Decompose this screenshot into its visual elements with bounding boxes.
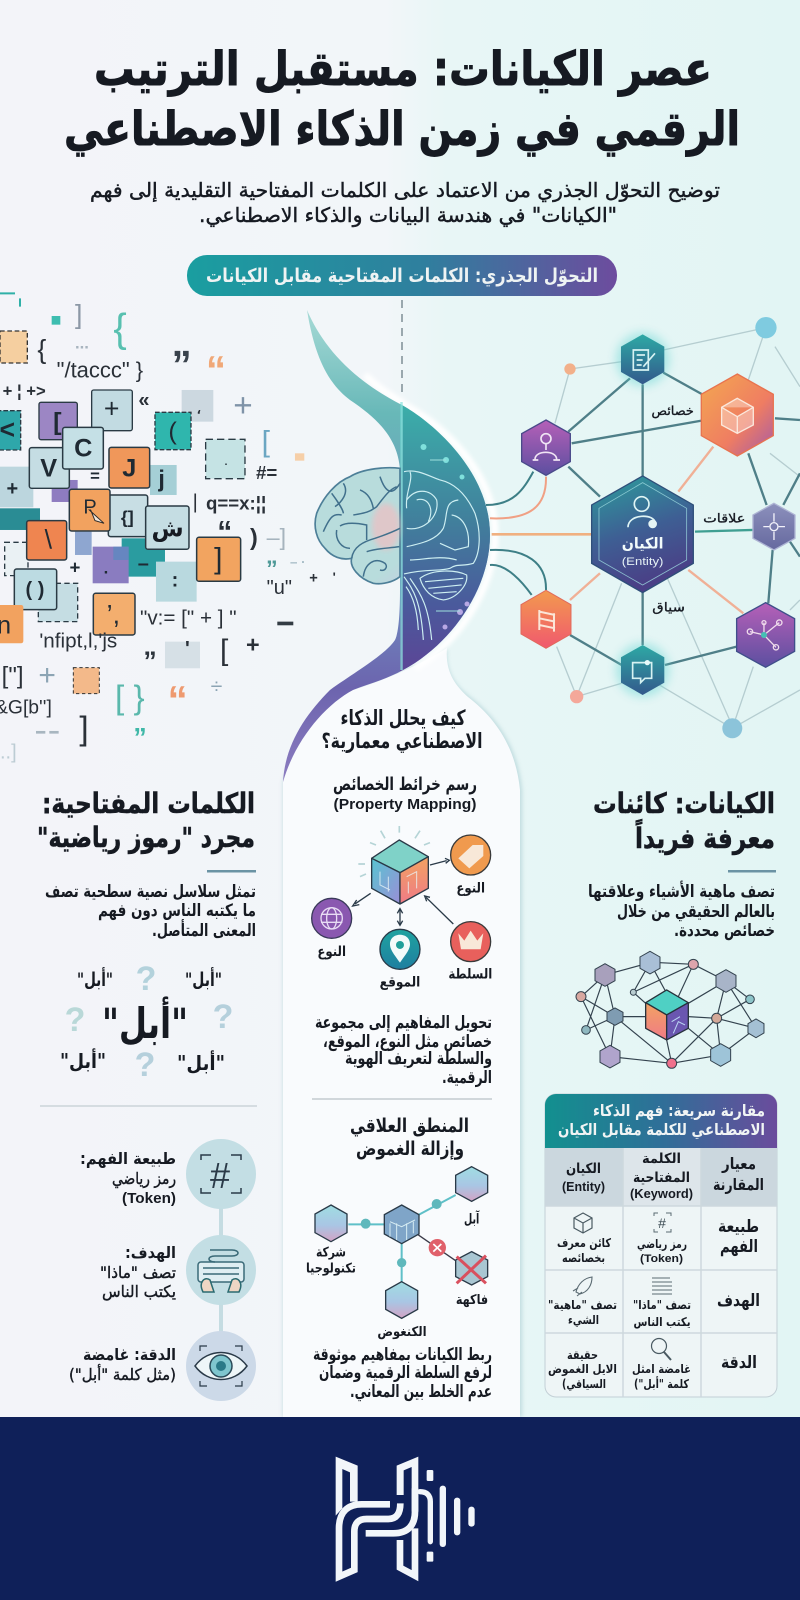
header row fill [545, 1146, 777, 1206]
property mapping paragraph [315, 1013, 492, 1088]
relational paragraph: ربط الكيانات بمفاهيم موثوقة [313, 1345, 492, 1365]
rays [358, 826, 430, 877]
row label cells [717, 1217, 760, 1373]
folds [323, 477, 400, 577]
loose middle and bottom symbols: + [246, 632, 260, 658]
central entity hexagon: (Entity) [622, 556, 664, 568]
loose middle and bottom symbols: 'nfipt,l,'js [39, 629, 117, 652]
tile glyphs: ش [152, 515, 184, 543]
hexes [315, 1167, 488, 1318]
header cells: المقارنة [713, 1175, 764, 1194]
loose middle and bottom symbols: ) [250, 524, 258, 550]
tile glyphs: J [122, 455, 136, 483]
hourglass ribbon [283, 310, 490, 782]
sub heading: property mapping: (Property Mapping) [334, 796, 477, 813]
woven H strokes [339, 1488, 415, 1577]
brain left half [315, 468, 400, 584]
heading [37, 787, 255, 854]
curves from the brain [486, 472, 592, 595]
hex: chat [616, 643, 669, 697]
dashed centre line [401, 300, 403, 395]
item: goal [100, 1235, 256, 1305]
tiles back layer [0, 390, 245, 622]
droplet right half [400, 404, 490, 671]
item: goal: تصف "ماذا" [100, 1263, 176, 1282]
description [45, 882, 256, 941]
sub heading: relational logic: وإزالة الغموض [356, 1138, 464, 1160]
loose top symbols: "/taccc" } [57, 357, 143, 382]
tile glyphs: [ [53, 408, 62, 436]
row: goal cells: تصف "ماذا" [633, 1298, 691, 1312]
arrows [353, 858, 453, 925]
tile glyphs: : [172, 570, 178, 592]
property mapping paragraph: خصائص مثل النوع، الموقع، [323, 1032, 492, 1052]
row: accuracy cells: الايل الغموض [548, 1362, 617, 1377]
labels: تكنولوجيا [306, 1262, 356, 1277]
row label cells: الدقة [721, 1353, 757, 1373]
tile glyphs: < [0, 414, 15, 444]
footer band [0, 1417, 800, 1600]
item: accuracy: الدقة: غامضة [83, 1345, 176, 1364]
relational paragraph: لرفع السلطة الرقمية وضمان [319, 1363, 492, 1383]
labels [317, 881, 492, 991]
row: goal cells [548, 1277, 691, 1329]
comparison table [545, 1094, 777, 1397]
row: accuracy cells: غامضة امثل [632, 1362, 691, 1376]
row: nature cells: (Token) [640, 1253, 683, 1265]
loose middle and bottom symbols: “ [217, 516, 232, 549]
header cells: الكيان [566, 1161, 601, 1177]
links [581, 963, 756, 1063]
ambiguous apple word cloud: "أبل" [60, 1047, 106, 1073]
hex: cube [701, 374, 773, 456]
loose top symbols [0, 293, 304, 461]
item: nature of understanding: (Token) [122, 1190, 176, 1207]
row: nature cells: بخصائصه [562, 1251, 605, 1265]
row label cells: الهدف [717, 1291, 760, 1311]
labels: شركة [316, 1246, 346, 1261]
vertical connector [219, 1200, 223, 1340]
loose middle and bottom symbols: ” [266, 556, 278, 582]
faint connector lines [555, 328, 800, 728]
pink highlight [372, 503, 400, 550]
label: entity: الكيان [622, 534, 663, 552]
loose middle and bottom symbols: “ [168, 678, 188, 722]
tile glyphs: ( ) [26, 579, 44, 601]
ambiguous apple word cloud: "أبل" [177, 1049, 225, 1075]
loose middle and bottom symbols: + [38, 659, 56, 692]
ambiguous apple word cloud: "أبل" [77, 967, 113, 991]
sub heading: relational logic: المنطق العلاقي [350, 1115, 469, 1137]
loose middle and bottom symbols: q==x:¦¦ [206, 492, 266, 513]
heading: الكلمات المفتاحية: [42, 787, 255, 820]
tile glyphs: ( [168, 417, 177, 445]
header cells: الكلمة [642, 1151, 681, 1167]
item: nature of understanding: طبيعة الفهم: [80, 1149, 176, 1168]
row: goal cells: الشيء [568, 1313, 599, 1327]
panel: entities [576, 787, 776, 1068]
tile glyphs: V [40, 455, 57, 483]
heading: مجرد "رموز رياضية" [37, 821, 255, 854]
row label cells: الفهم [720, 1237, 758, 1257]
hex: document [616, 333, 669, 386]
item: goal: يكتب الناس [102, 1282, 176, 1301]
right top stem [397, 1457, 418, 1512]
row: goal cells: تصف "ماهية" [548, 1298, 617, 1312]
header cells: (Keyword) [630, 1186, 693, 1201]
central entity hexagon [592, 476, 693, 593]
loose middle and bottom symbols: "v:= [" + ] " [140, 606, 237, 629]
centre to relations line [695, 530, 753, 532]
heading [322, 706, 482, 753]
tile glyphs: + [70, 556, 81, 577]
tile glyphs: + [6, 478, 18, 500]
labels: فاكهة [456, 1293, 488, 1308]
loose middle and bottom symbols: ” [133, 723, 147, 753]
item: accuracy: (مثل كلمة "أبل") [69, 1364, 176, 1384]
strong connector lines [568, 373, 800, 665]
ambiguous apple word cloud: ? [65, 1001, 85, 1039]
section pill heading: التحوّل الجذري: الكلمات المفتاحية مقابل الكيانات [206, 265, 598, 288]
heading: كيف يحلل الذكاء [340, 706, 466, 730]
loose middle and bottom symbols: "u" [267, 577, 292, 599]
loose top symbols: ، [197, 401, 201, 416]
item: goal: الهدف: [125, 1243, 176, 1262]
labels: النوع [456, 881, 485, 897]
ambiguous apple word cloud: "أبل" [102, 996, 188, 1048]
hex: network [737, 603, 795, 667]
loose top symbols: « [138, 390, 149, 412]
description: خصائص محددة. [674, 921, 775, 941]
row: accuracy cells: كلمة "أبل") [634, 1376, 689, 1391]
loose top symbols: + [233, 388, 253, 425]
ambiguous apple word cloud: ? [213, 998, 233, 1036]
tiles front layer [0, 427, 241, 643]
rejected mark [429, 1239, 486, 1283]
sub heading: property mapping [333, 774, 477, 813]
loose top symbols: ” [172, 343, 192, 387]
item: nature of understanding [80, 1139, 256, 1209]
header cells: (Entity) [562, 1179, 605, 1194]
tile glyphs: ] [214, 542, 222, 575]
nodes [576, 951, 764, 1068]
item: nature of understanding: # [210, 1155, 230, 1196]
loose middle and bottom symbols: | [193, 491, 198, 513]
tile glyphs: + [104, 393, 119, 423]
property: type tag [451, 835, 491, 875]
sound wave bars [427, 1470, 475, 1562]
tile glyphs: = [90, 467, 100, 486]
tile glyphs: . [104, 558, 108, 577]
property mapping paragraph: والسلطة لتعريف الهوية [345, 1049, 492, 1069]
disambiguation diagram [306, 1167, 488, 1340]
panel: how AI analyses [306, 706, 492, 1402]
labels [306, 1209, 488, 1340]
grid lines [545, 1148, 777, 1397]
row: nature cells [557, 1213, 687, 1265]
table title band [545, 1094, 777, 1148]
loose middle and bottom symbols: ' [185, 638, 190, 660]
ambiguous apple word cloud: "أبل" [185, 967, 222, 991]
relational paragraph [313, 1345, 492, 1402]
tile glyphs: {] [121, 507, 134, 527]
property mapping paragraph: الرقمية. [442, 1068, 492, 1088]
left top stem [336, 1457, 358, 1516]
loose middle and bottom symbols: –] [267, 524, 286, 550]
table body [545, 1094, 777, 1397]
table title band: الاصطناعي للكلمة مقابل الكيان [558, 1120, 765, 1140]
header cells [562, 1151, 764, 1201]
network labels: خصائص [651, 403, 694, 419]
section pill heading [187, 255, 617, 296]
orange connector lines [570, 447, 743, 613]
brain right half lines [404, 471, 479, 640]
heading: معرفة فريداً [635, 818, 775, 855]
tile glyphs: j [157, 466, 165, 492]
hex: relations node [753, 503, 795, 550]
glowing centre line [400, 402, 403, 670]
loose middle and bottom symbols: ÷ [211, 674, 223, 698]
loose middle and bottom symbols: ' [333, 570, 336, 585]
loose top symbols: “ [206, 348, 226, 392]
logo [336, 1457, 475, 1577]
loose middle and bottom symbols: #= [256, 462, 277, 483]
subtitle [90, 178, 720, 228]
outer balls [564, 317, 777, 738]
loose top symbols: ] [75, 299, 82, 329]
heading [593, 787, 775, 855]
row: accuracy cells: حقيقة [567, 1348, 598, 1362]
ambiguous apple word cloud [60, 960, 233, 1084]
item: accuracy [69, 1331, 256, 1401]
title: عصر الكيانات: مستقبل الترتيب [94, 42, 712, 97]
property: authority crown [451, 922, 491, 962]
keyword chaos of tiles and symbols [0, 293, 336, 763]
row: nature cells: # [658, 1215, 666, 1231]
hex: people [522, 420, 570, 475]
loose middle and bottom symbols: ["] [2, 662, 24, 689]
row label cells: طبيعة [718, 1217, 759, 1237]
row: accuracy cells [548, 1338, 691, 1391]
loose middle and bottom symbols: [ } [115, 679, 145, 716]
row: nature cells: رمز رياضي [637, 1237, 687, 1251]
labels: آبل [464, 1209, 480, 1227]
labels: الكنغوض [377, 1325, 427, 1340]
labels: النوع [317, 944, 346, 960]
property mapping paragraph: تحويل المفاهيم إلى مجموعة [315, 1013, 492, 1033]
tile glyphs: P [83, 496, 97, 518]
hex: database [521, 590, 571, 648]
description: ما يكتبه الناس دون فهم [98, 901, 256, 921]
panel: keywords [37, 787, 257, 1401]
description: المعنى المتأصل. [152, 919, 256, 941]
network labels: علاقات [703, 511, 745, 526]
centre white panel [283, 648, 522, 1417]
loose middle and bottom symbols: + [309, 571, 318, 587]
loose top symbols: { [113, 307, 127, 351]
property: location [380, 929, 420, 969]
description: تمثل سلاسل نصية سطحية تصف [45, 882, 256, 902]
labels: السلطة [448, 966, 492, 982]
links [348, 1195, 456, 1282]
network labels: سياق [652, 600, 685, 616]
description [588, 881, 775, 941]
central cube [646, 990, 688, 1040]
loose middle and bottom symbols [0, 462, 336, 763]
property mapping diagram [312, 826, 492, 991]
tile glyphs [0, 393, 228, 639]
tile glyphs: ’, [107, 599, 120, 629]
white glow edge [365, 375, 495, 668]
cube [372, 840, 428, 904]
ambiguous apple word cloud: ? [136, 960, 156, 998]
labels: الموقع [380, 975, 420, 991]
subtitle: توضيح التحوّل الجذري من الاعتماد على الكلمات المفتاحية التقليدية إلى فهم [90, 178, 720, 203]
loose middle and bottom symbols: ] [79, 710, 89, 747]
hourglass divider with brain [283, 300, 495, 782]
row: nature cells: كائن معرف [557, 1236, 611, 1250]
header cells: معيار [721, 1154, 756, 1173]
tile glyphs: . [225, 457, 228, 468]
row: goal cells: يكتب الناس [634, 1315, 690, 1329]
tile glyphs: C [74, 435, 92, 463]
sub heading: relational logic [350, 1115, 469, 1160]
item: nature of understanding: رمز رياضي [112, 1169, 176, 1189]
subtitle: "الكيانات" في هندسة البيانات والذكاء الاصطناعي. [199, 203, 617, 228]
header cells: المفتاحية [633, 1170, 690, 1186]
loose top symbols: ... [75, 333, 89, 352]
ambiguous apple word cloud: ? [135, 1046, 155, 1084]
loose middle and bottom symbols: ” [143, 646, 157, 676]
tile glyphs: \ [45, 524, 53, 554]
property: type globe [312, 898, 352, 938]
loose middle and bottom symbols: ..] [0, 741, 17, 763]
knowledge graph [576, 951, 764, 1068]
entity network [486, 317, 800, 738]
heading: الاصطناعي معمارية؟ [322, 729, 482, 753]
relational paragraph: عدم الخلط بين المعاني. [350, 1382, 492, 1402]
table title band: مقارنة سريعة: فهم الذكاء [593, 1101, 765, 1120]
tile glyphs: – [138, 553, 149, 575]
droplet sparkle dots [420, 444, 470, 630]
row: accuracy cells: السياقي) [562, 1377, 606, 1391]
title [64, 42, 740, 157]
loose top symbols: [ [262, 426, 271, 459]
loose middle and bottom symbols: [ [220, 634, 229, 667]
network labels [651, 403, 745, 616]
sub heading: property mapping: رسم خرائط الخصائص [333, 774, 477, 795]
loose top symbols: { [37, 334, 46, 364]
loose middle and bottom symbols: – · [290, 555, 306, 570]
icon: person with check [628, 497, 655, 527]
loose top symbols: + ¦ +> [3, 382, 46, 401]
